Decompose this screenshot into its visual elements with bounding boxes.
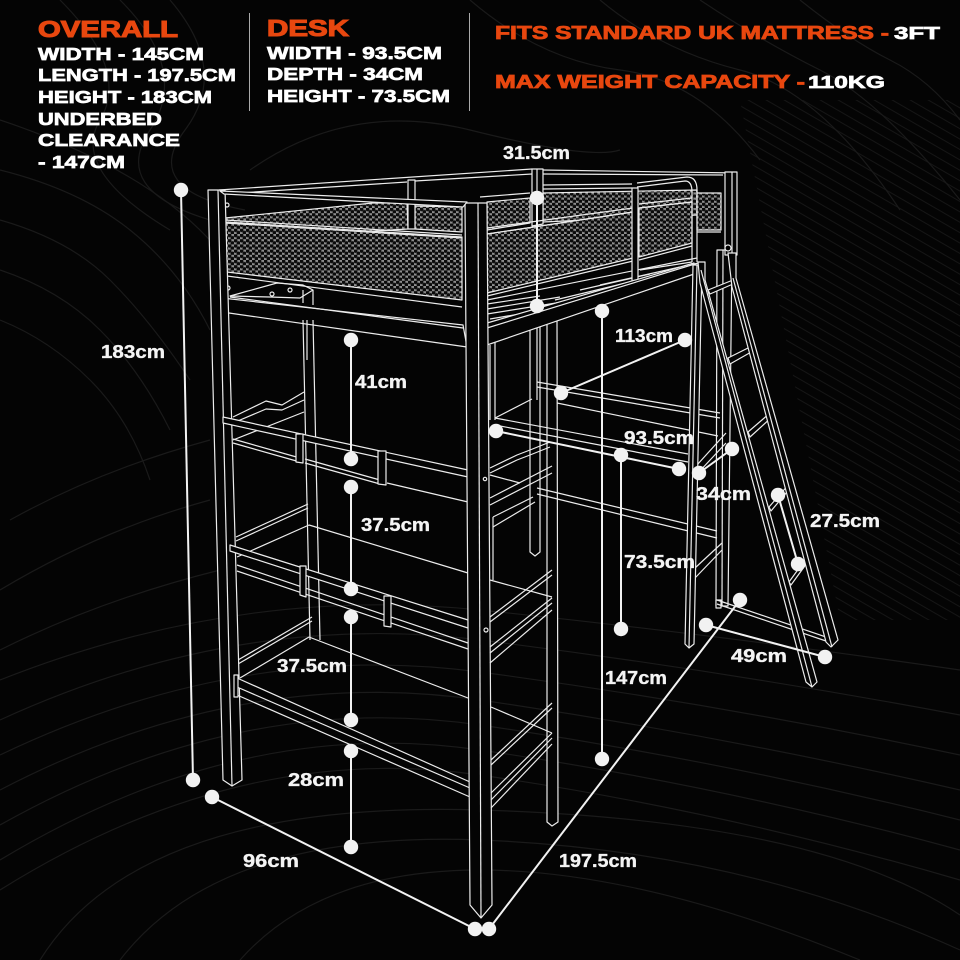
rear left post bbox=[303, 320, 320, 640]
dimension markers bbox=[174, 183, 832, 936]
right side rails bbox=[490, 442, 552, 808]
dimension: 28cm bbox=[344, 744, 358, 854]
dimension: 31.5cm rail height bbox=[530, 191, 544, 313]
text: mattress fit and weight capacity: MAX WEIGHT CAPACITY - bbox=[495, 72, 805, 92]
heading: overall dimensions: OVERALL bbox=[38, 16, 178, 42]
dimension: 113cm bbox=[554, 333, 692, 400]
heading: overall dimensions: WIDTH - 145CM bbox=[38, 44, 204, 64]
front shelf rails bbox=[223, 417, 470, 797]
dimension labels: 41cm bbox=[355, 372, 407, 392]
heading: desk dimensions: DEPTH - 34CM bbox=[267, 64, 423, 84]
back guard rails and mesh panels bbox=[219, 169, 737, 255]
heading: overall dimensions bbox=[38, 16, 236, 172]
dimension labels: 37.5cm bbox=[361, 515, 430, 535]
dimension labels: 197.5cm bbox=[559, 851, 637, 871]
heading: desk dimensions: WIDTH - 93.5CM bbox=[267, 43, 442, 63]
dimension labels: 27.5cm bbox=[810, 511, 880, 531]
top rail edge bbox=[220, 191, 467, 207]
dimension labels: 96cm bbox=[243, 851, 299, 871]
dimension: 183cm height bbox=[174, 183, 200, 787]
dimension labels: 28cm bbox=[288, 770, 344, 790]
text: mattress fit and weight capacity: 110KG bbox=[808, 72, 885, 92]
front guard rails and mesh panels bbox=[225, 177, 697, 307]
dimension labels: 147cm bbox=[605, 668, 667, 688]
heading: overall dimensions: HEIGHT - 183CM bbox=[38, 87, 212, 107]
dimension: 37.5cm upper bbox=[344, 480, 358, 596]
shelf ladder back rails bbox=[233, 392, 468, 698]
dimension: 93.5cm desk width bbox=[489, 424, 686, 476]
dimension labels: 93.5cm bbox=[624, 428, 694, 448]
desk and rear structure bbox=[495, 250, 826, 826]
dimension labels: 73.5cm bbox=[624, 552, 695, 572]
heading: overall dimensions: - 147CM bbox=[38, 152, 125, 172]
ladder bbox=[698, 245, 838, 687]
text: mattress fit and weight capacity bbox=[495, 23, 940, 92]
dimension: 147cm clearance bbox=[595, 304, 609, 766]
line drawing: loft bed frame bbox=[208, 169, 838, 918]
front corner post bbox=[465, 203, 492, 918]
dimension: 49cm ladder base bbox=[699, 618, 832, 664]
dimension: 197.5cm length bbox=[482, 593, 747, 936]
dimension labels bbox=[101, 143, 880, 871]
heading: overall dimensions: UNDERBED bbox=[38, 109, 162, 129]
text: mattress fit and weight capacity: 3FT bbox=[894, 23, 940, 43]
dimension: 96cm width bbox=[205, 790, 482, 936]
dimension labels: 49cm bbox=[731, 646, 787, 666]
heading: desk dimensions: DESK bbox=[267, 15, 349, 41]
left back post bbox=[208, 190, 242, 786]
dimension: 27.5cm rung spacing bbox=[771, 488, 805, 571]
bed deck beams bbox=[222, 263, 698, 580]
text: mattress fit and weight capacity: FITS STANDARD UK MATTRESS - bbox=[495, 23, 889, 43]
heading: overall dimensions: CLEARANCE bbox=[38, 130, 180, 150]
dimension labels: 183cm bbox=[101, 342, 165, 362]
dimension: 34cm desk depth bbox=[692, 442, 739, 480]
dimension: 37.5cm lower bbox=[344, 610, 358, 727]
heading: desk dimensions bbox=[267, 15, 450, 106]
dimension labels: 31.5cm bbox=[503, 143, 570, 163]
heading: desk dimensions: HEIGHT - 73.5CM bbox=[267, 86, 450, 106]
heading: overall dimensions: LENGTH - 197.5CM bbox=[38, 65, 236, 85]
right front post bbox=[685, 265, 702, 648]
dimension labels: 113cm bbox=[615, 326, 673, 346]
dimension labels: 37.5cm bbox=[277, 656, 347, 676]
bed slats bbox=[225, 203, 697, 319]
dimension: 73.5cm desk height bbox=[614, 448, 628, 636]
dimension: 41cm bbox=[344, 333, 358, 466]
dimension labels: 34cm bbox=[696, 484, 751, 504]
